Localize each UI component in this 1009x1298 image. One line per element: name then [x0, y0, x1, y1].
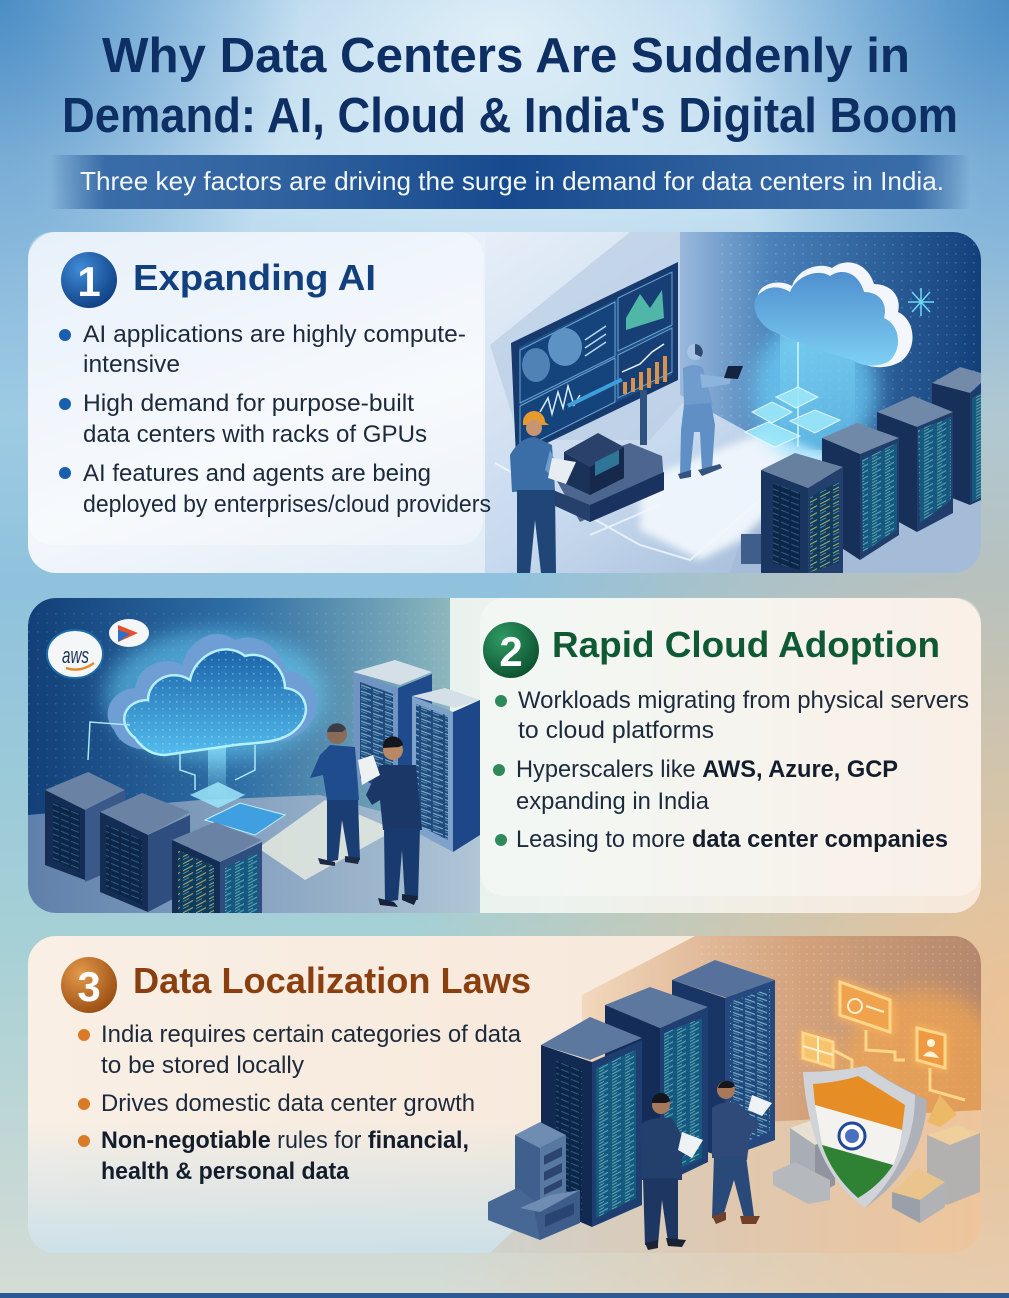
bullet list: Leasing to more data center companies [516, 826, 948, 853]
businessman one [640, 1093, 703, 1250]
bullet list [59, 321, 491, 518]
title [62, 29, 958, 143]
bullet list [78, 1021, 522, 1185]
businessman one [310, 723, 360, 866]
bullet list: India requires certain categories of data [101, 1021, 522, 1048]
bullet list: Hyperscalers like AWS, Azure, GCP [516, 756, 898, 783]
console unit [553, 433, 664, 522]
bullet list: to be stored locally [101, 1052, 304, 1079]
title: Demand: AI, Cloud & India's Digital Boom [62, 89, 958, 143]
badge: number 2: 2 [499, 628, 523, 675]
title: Why Data Centers Are Suddenly in [102, 29, 910, 83]
heading: rapid cloud adoption: Rapid Cloud Adoption [552, 624, 940, 665]
small server stack [488, 1122, 580, 1240]
storage boxes [773, 1095, 980, 1223]
bullet list: to cloud platforms [518, 717, 714, 744]
glowing data icons [800, 978, 965, 1100]
bullet list [493, 687, 969, 853]
icon: India flag shield [803, 1066, 927, 1208]
wall monitor [511, 262, 678, 458]
icon: starburst [908, 288, 934, 316]
illustration: racks, businessmen and India shield [488, 936, 1009, 1253]
bullet list: intensive [83, 351, 180, 378]
badge: number 1: 1 [77, 258, 101, 305]
text panel [28, 232, 483, 545]
badge: number 3: 3 [77, 963, 101, 1010]
glowing chips [745, 387, 840, 447]
bullet list: health & personal data [101, 1158, 350, 1185]
heading: expanding AI: Expanding AI [133, 257, 376, 298]
panel: expanding AI [28, 232, 981, 573]
racks [541, 960, 775, 1227]
badge: number 3 [61, 957, 117, 1013]
heading: data localization laws: Data Localization Laws [133, 960, 531, 1001]
subtitle band [50, 155, 970, 209]
bullet list: High demand for purpose-built [83, 390, 414, 417]
businessman two with tablet [358, 736, 422, 907]
badge: number 1 [61, 252, 117, 308]
robot figure [678, 344, 743, 479]
bullet list: data centers with racks of GPUs [83, 421, 427, 448]
right server racks [353, 660, 480, 852]
panel: rapid cloud adoption [28, 598, 981, 913]
icon: glowing cloud [88, 630, 325, 835]
logo bubble: aws [47, 630, 103, 678]
bullet list: Drives domestic data center growth [101, 1090, 475, 1117]
bullet list: AI applications are highly compute- [83, 321, 466, 348]
bullet list: expanding in India [516, 788, 710, 815]
logo bubble: aws: aws [62, 643, 89, 668]
subtitle band: Three key factors are driving the surge in demand for data centers in India. [80, 166, 944, 196]
server racks [741, 367, 981, 573]
bullet list: Workloads migrating from physical servers [518, 687, 969, 714]
bullet list: AI features and agents are being [83, 460, 431, 487]
text panel [480, 598, 981, 896]
illustration: cloud hub, logos, racks and two businessmen [28, 598, 480, 913]
badge: number 2 [483, 622, 539, 678]
businessman two [712, 1081, 772, 1224]
left server racks [45, 772, 262, 913]
panel: data localization laws [28, 936, 1009, 1253]
worker with hard hat [510, 411, 576, 573]
bullet list: deployed by enterprises/cloud providers [83, 491, 491, 518]
bullet list: Non-negotiable rules for financial, [101, 1127, 469, 1154]
logo bubble: second cloud provider [109, 619, 149, 647]
icon: cloud [753, 262, 913, 460]
illustration: AI data center with monitor, robot, cloud and racks [485, 232, 981, 573]
